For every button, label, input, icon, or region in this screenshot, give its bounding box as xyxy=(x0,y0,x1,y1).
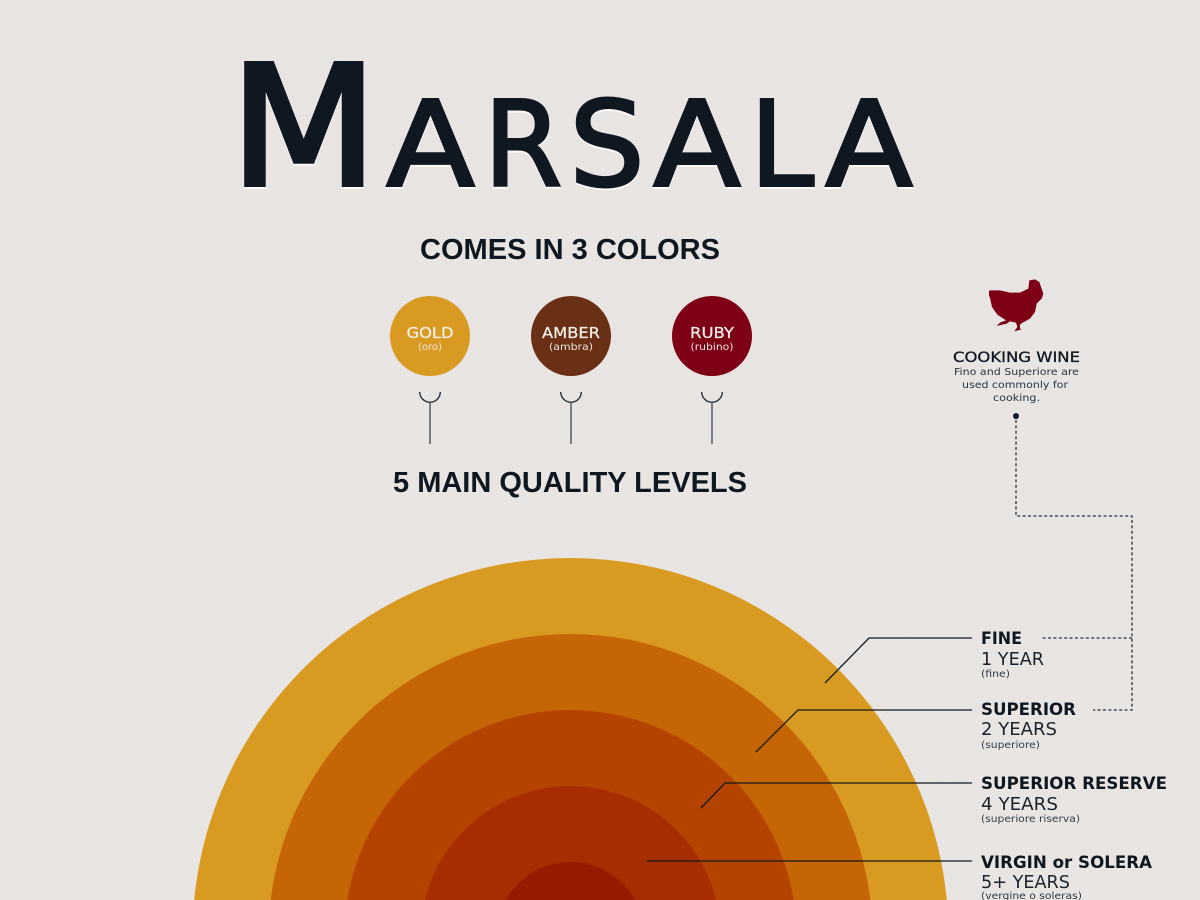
callout: cooking wine: used commonly for xyxy=(962,380,1069,391)
label: superior reserve: (superiore riserva) xyxy=(981,814,1080,825)
colour: ruby xyxy=(672,296,752,376)
callout: cooking wine: Fino and Superiore are xyxy=(954,367,1079,378)
callout: cooking wine: COOKING WINE xyxy=(953,350,1080,366)
colour: gold: GOLD xyxy=(406,324,454,342)
title: M xyxy=(230,32,378,224)
colour: amber xyxy=(531,296,611,376)
title xyxy=(230,32,912,224)
label: virgin or solera xyxy=(981,853,1152,900)
icon: glass amber xyxy=(561,392,581,444)
label: virgin or solera: VIRGIN or SOLERA xyxy=(981,853,1152,872)
icon: glass gold xyxy=(420,392,440,444)
label: fine: FINE xyxy=(981,629,1022,648)
label: fine: (fine) xyxy=(981,669,1010,680)
label: fine xyxy=(981,629,1044,680)
colour: amber: AMBER xyxy=(542,324,600,342)
callout: cooking wine: cooking. xyxy=(993,393,1040,404)
title: R xyxy=(484,76,562,214)
label: superior reserve: 4 YEARS xyxy=(981,795,1058,815)
callout: cooking wine xyxy=(953,350,1080,404)
label: superior: SUPERIOR xyxy=(981,700,1076,719)
title: A xyxy=(826,76,912,214)
label: superior: 2 YEARS xyxy=(981,720,1057,740)
icon: chicken xyxy=(989,279,1043,331)
label: fine: 1 YEAR xyxy=(981,650,1044,670)
label: virgin or solera: 5+ YEARS xyxy=(981,873,1070,893)
heading: 5 main quality levels: 5 MAIN QUALITY LEVELS xyxy=(393,467,747,499)
colour: ruby: (rubino) xyxy=(690,342,734,353)
chart: concentric quality rings xyxy=(192,558,948,900)
label: superior reserve: SUPERIOR RESERVE xyxy=(981,774,1167,793)
label: superior: (superiore) xyxy=(981,740,1040,751)
title: S xyxy=(570,76,644,214)
dashed connector xyxy=(1013,413,1132,710)
label: superior xyxy=(981,700,1076,751)
title: A xyxy=(386,76,474,214)
leader lines xyxy=(647,638,972,861)
colour: gold: (oro) xyxy=(418,342,442,353)
colour: ruby: RUBY xyxy=(690,324,735,342)
icon: glass ruby xyxy=(702,392,722,444)
colour: amber: (ambra) xyxy=(549,342,593,353)
heading: comes in 3 colors: COMES IN 3 COLORS xyxy=(420,234,720,266)
title: A xyxy=(654,76,740,214)
colour: gold xyxy=(390,296,470,376)
title: L xyxy=(750,76,814,214)
label: superior reserve xyxy=(981,774,1167,825)
